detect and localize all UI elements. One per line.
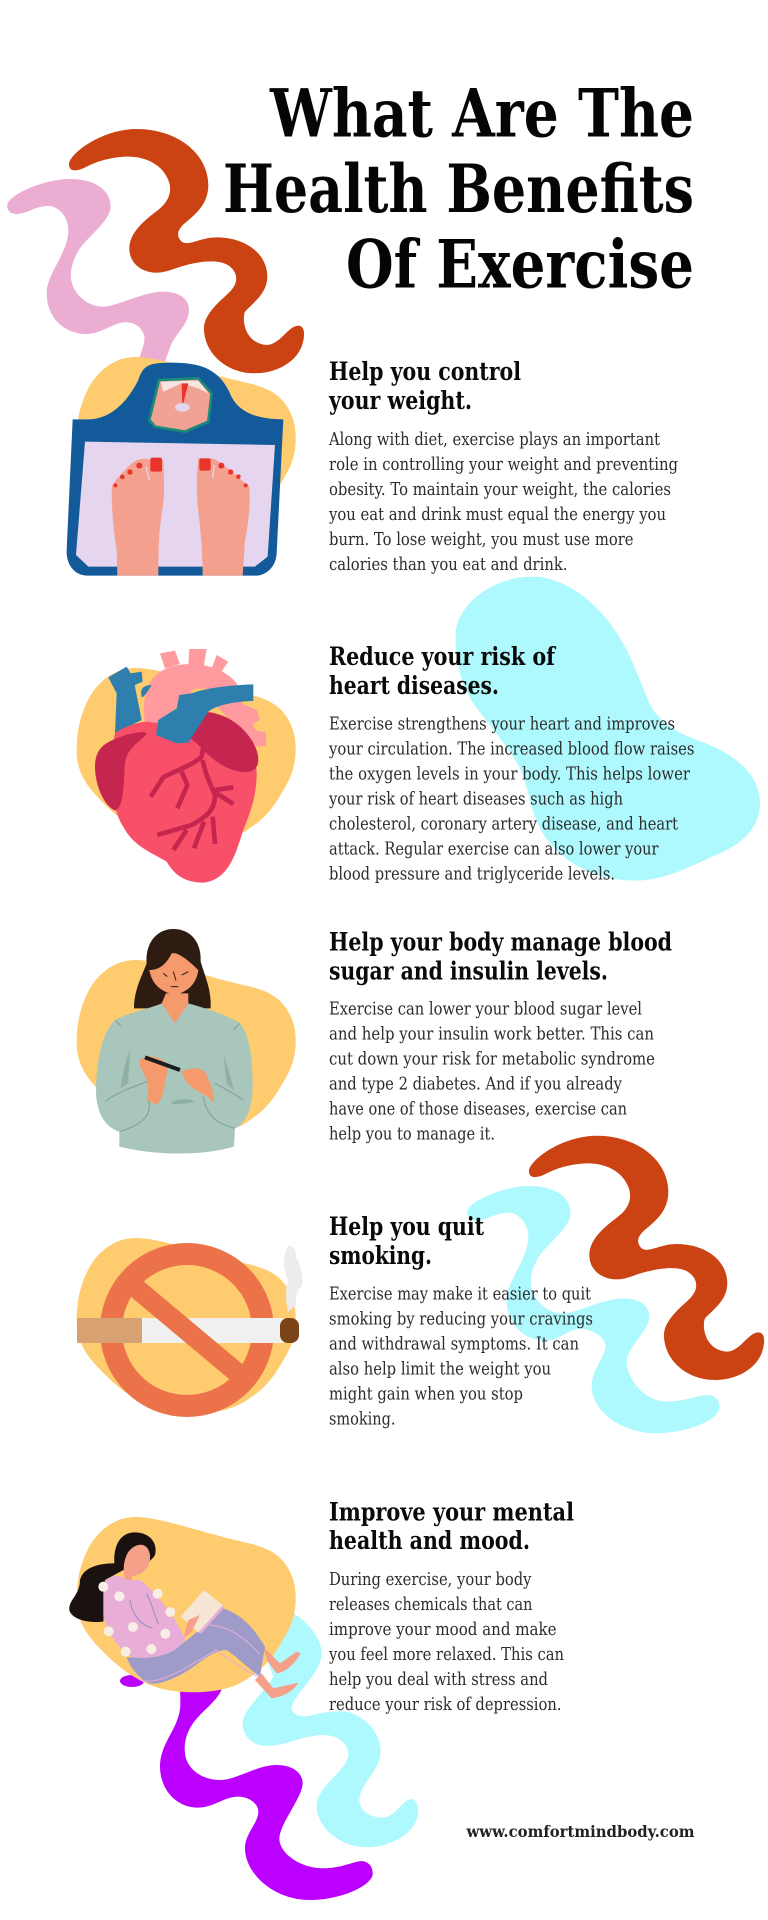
section 5 body text: help you deal with stress and <box>329 1669 548 1690</box>
section 2 body text: attack. Regular exercise can also lower your <box>329 838 659 860</box>
section 5 body text: you feel more relaxed. This can <box>328 1644 564 1665</box>
section 3 body text: and type 2 diabetes. And if you already <box>329 1074 623 1094</box>
decorative wiggle: red smoking section <box>529 1136 764 1380</box>
footer website url: www.comfortmindbody.com <box>466 1822 695 1841</box>
section 4 body text: might gain when you stop <box>329 1384 523 1404</box>
decorative wiggle: cyan bottom <box>243 1613 418 1847</box>
illustration: bathroom scale with feet <box>67 357 296 576</box>
section 5 body text: improve your mood and make <box>329 1619 556 1640</box>
decorative wiggle: red top <box>69 129 304 373</box>
section 1 body text: obesity. To maintain your weight, the calories <box>329 479 671 500</box>
section 1 body text: calories than you eat and drink. <box>329 554 568 575</box>
section 3 body text: and help your insulin work better. This can <box>329 1024 654 1044</box>
title <box>223 74 694 304</box>
section 3 body text: Exercise can lower your blood sugar level <box>329 998 642 1020</box>
illustration: woman reading a book <box>69 1517 301 1698</box>
section 2 heading: Reduce your risk of <box>329 642 557 671</box>
decorative wiggle: purple bottom <box>120 1675 373 1900</box>
section 1 heading: Help you control <box>329 357 521 386</box>
section 3 heading: sugar and insulin levels. <box>329 956 608 986</box>
section 1 body text: you eat and drink must equal the energy you <box>328 504 666 525</box>
illustration: anatomical heart <box>77 649 296 883</box>
section 3 body text: help you to manage it. <box>329 1124 495 1144</box>
section 5 body text: reduce your risk of depression. <box>329 1694 562 1715</box>
section 5 heading: Improve your mental <box>329 1498 574 1526</box>
section 3 heading: Help your body manage blood <box>329 928 672 956</box>
decorative blob: cyan behind heart section <box>456 577 760 881</box>
section 4 body text: smoking. <box>329 1408 396 1430</box>
section 5 body text: releases chemicals that can <box>329 1594 533 1615</box>
illustration: woman checking blood sugar <box>77 929 296 1154</box>
title: Of Exercise <box>346 226 694 304</box>
section 2 body text <box>328 714 694 884</box>
section 1 body text: Along with diet, exercise plays an important <box>328 429 661 450</box>
section 2 heading: heart diseases. <box>329 671 499 700</box>
section 5 body text <box>328 1569 564 1715</box>
section 4 body text: smoking by reducing your cravings <box>329 1308 593 1330</box>
section 1 heading: your weight. <box>328 386 472 415</box>
section 4 heading: smoking. <box>329 1241 432 1270</box>
section 4 body text: Exercise may make it easier to quit <box>329 1284 592 1304</box>
section 2 body text: your circulation. The increased blood flow raises <box>328 738 694 760</box>
section 2 body text: blood pressure and triglyceride levels. <box>329 864 615 884</box>
section 2 body text: your risk of heart diseases such as high <box>328 788 623 810</box>
section 5 heading <box>329 1498 574 1555</box>
section 1 body text: role in controlling your weight and preventing <box>329 454 678 475</box>
section 4 heading: Help you quit <box>329 1212 484 1241</box>
section 5 body text: During exercise, your body <box>329 1569 532 1590</box>
section 4 body text: and withdrawal symptoms. It can <box>329 1334 579 1354</box>
section 1 heading <box>328 357 521 415</box>
section 3 heading <box>329 928 672 986</box>
title: What Are The <box>269 74 694 152</box>
section 2 heading <box>329 642 557 700</box>
section 2 body text: cholesterol, coronary artery disease, and heart <box>329 814 679 834</box>
section 3 body text <box>329 998 655 1144</box>
decorative wiggle: cyan smoking section <box>467 1186 719 1433</box>
section 5 heading: health and mood. <box>329 1526 530 1555</box>
decorative wiggle: pink top left <box>7 179 189 362</box>
section 4 body text <box>329 1284 593 1430</box>
illustration: no smoking cigarette <box>77 1238 302 1413</box>
section 3 body text: have one of those diseases, exercise can <box>329 1098 627 1120</box>
section 1 body text <box>328 429 678 575</box>
section 2 body text: Exercise strengthens your heart and improves <box>329 714 675 734</box>
section 1 body text: burn. To lose weight, you must use more <box>329 529 634 550</box>
section 3 body text: cut down your risk for metabolic syndrome <box>329 1048 655 1070</box>
section 4 heading <box>329 1212 484 1270</box>
section 4 body text: also help limit the weight you <box>329 1358 551 1380</box>
section 2 body text: the oxygen levels in your body. This helps lower <box>329 764 690 784</box>
